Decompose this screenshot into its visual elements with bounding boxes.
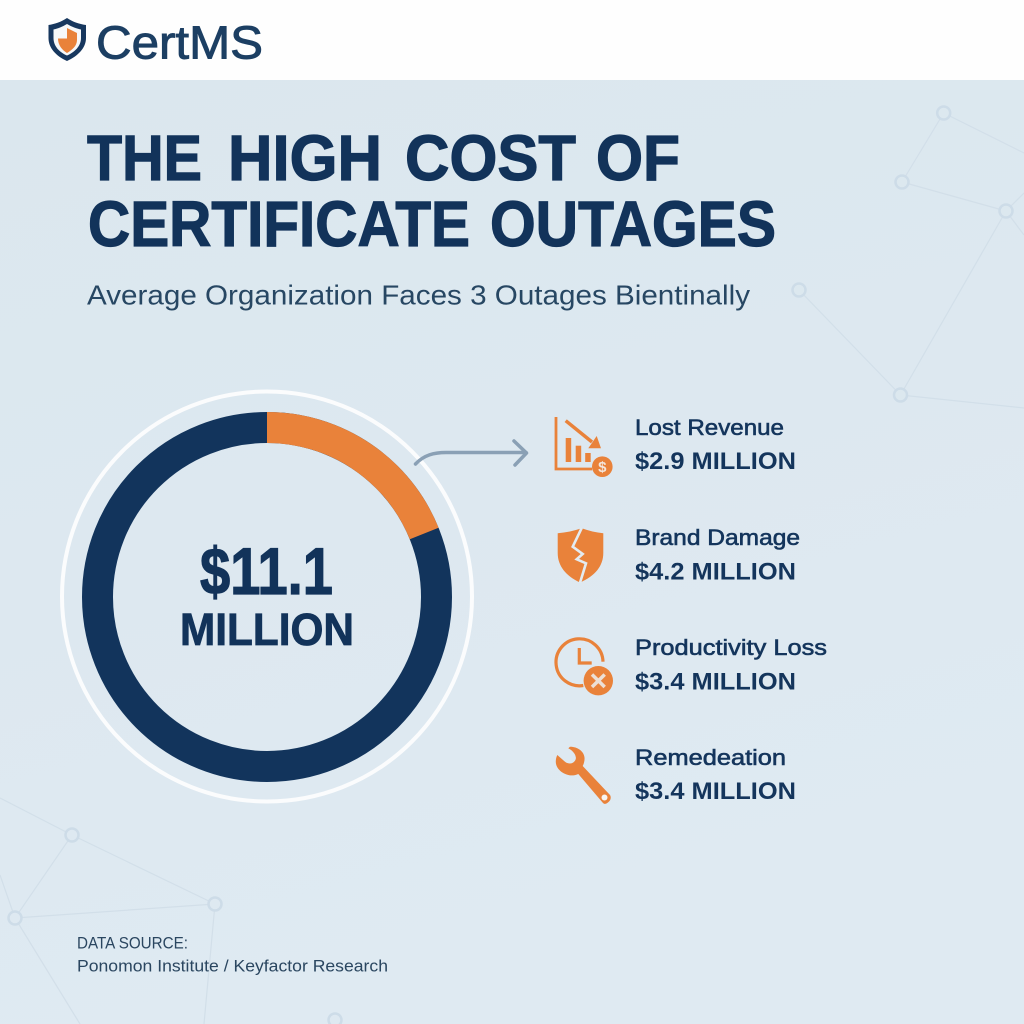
logo xyxy=(48,16,263,68)
cost item: productivity loss xyxy=(556,635,827,696)
title: HIGH xyxy=(228,122,382,194)
title: OUTAGES xyxy=(490,188,776,260)
title: COST xyxy=(405,122,576,194)
value: $3.4 MILLION xyxy=(635,668,796,696)
icon: cracked shield xyxy=(558,528,603,583)
title: OF xyxy=(596,122,680,194)
icon: falling revenue chart xyxy=(556,417,613,477)
brand name: CertMS xyxy=(96,16,263,68)
donut value: $11.1 xyxy=(200,534,333,608)
subtitle: Average Organization Faces 3 Outages Bientinally xyxy=(87,280,750,310)
orange segment xyxy=(267,428,424,534)
cost item: brand damage xyxy=(558,525,800,586)
icon: clock with x xyxy=(556,639,613,695)
network pattern: top right xyxy=(792,106,1024,408)
arrow: callout connector xyxy=(416,441,526,465)
cost item: lost revenue xyxy=(556,415,796,477)
label: Productivity Loss xyxy=(635,635,827,660)
donut chart xyxy=(62,392,472,802)
value: $2.9 MILLION xyxy=(635,448,796,475)
donut unit: MILLION xyxy=(180,604,354,655)
title: CERTIFICATE xyxy=(88,188,470,260)
icon: falling revenue chart: $ xyxy=(598,459,607,476)
title: THE xyxy=(87,122,202,194)
value: $4.2 MILLION xyxy=(635,558,796,586)
data source: Ponomon Institute / Keyfactor Research xyxy=(77,956,388,976)
data source: DATA SOURCE: xyxy=(77,934,188,952)
icon: shield xyxy=(48,18,86,61)
title xyxy=(87,122,776,260)
label: Remedeation xyxy=(635,745,786,770)
data source xyxy=(77,934,388,976)
network pattern: bottom left xyxy=(0,798,342,1024)
value: $3.4 MILLION xyxy=(635,778,796,805)
label: Lost Revenue xyxy=(635,415,784,440)
header bar xyxy=(0,0,1024,80)
cost item: remediation xyxy=(556,745,796,805)
label: Brand Damage xyxy=(635,525,800,550)
icon: wrench xyxy=(556,747,611,804)
